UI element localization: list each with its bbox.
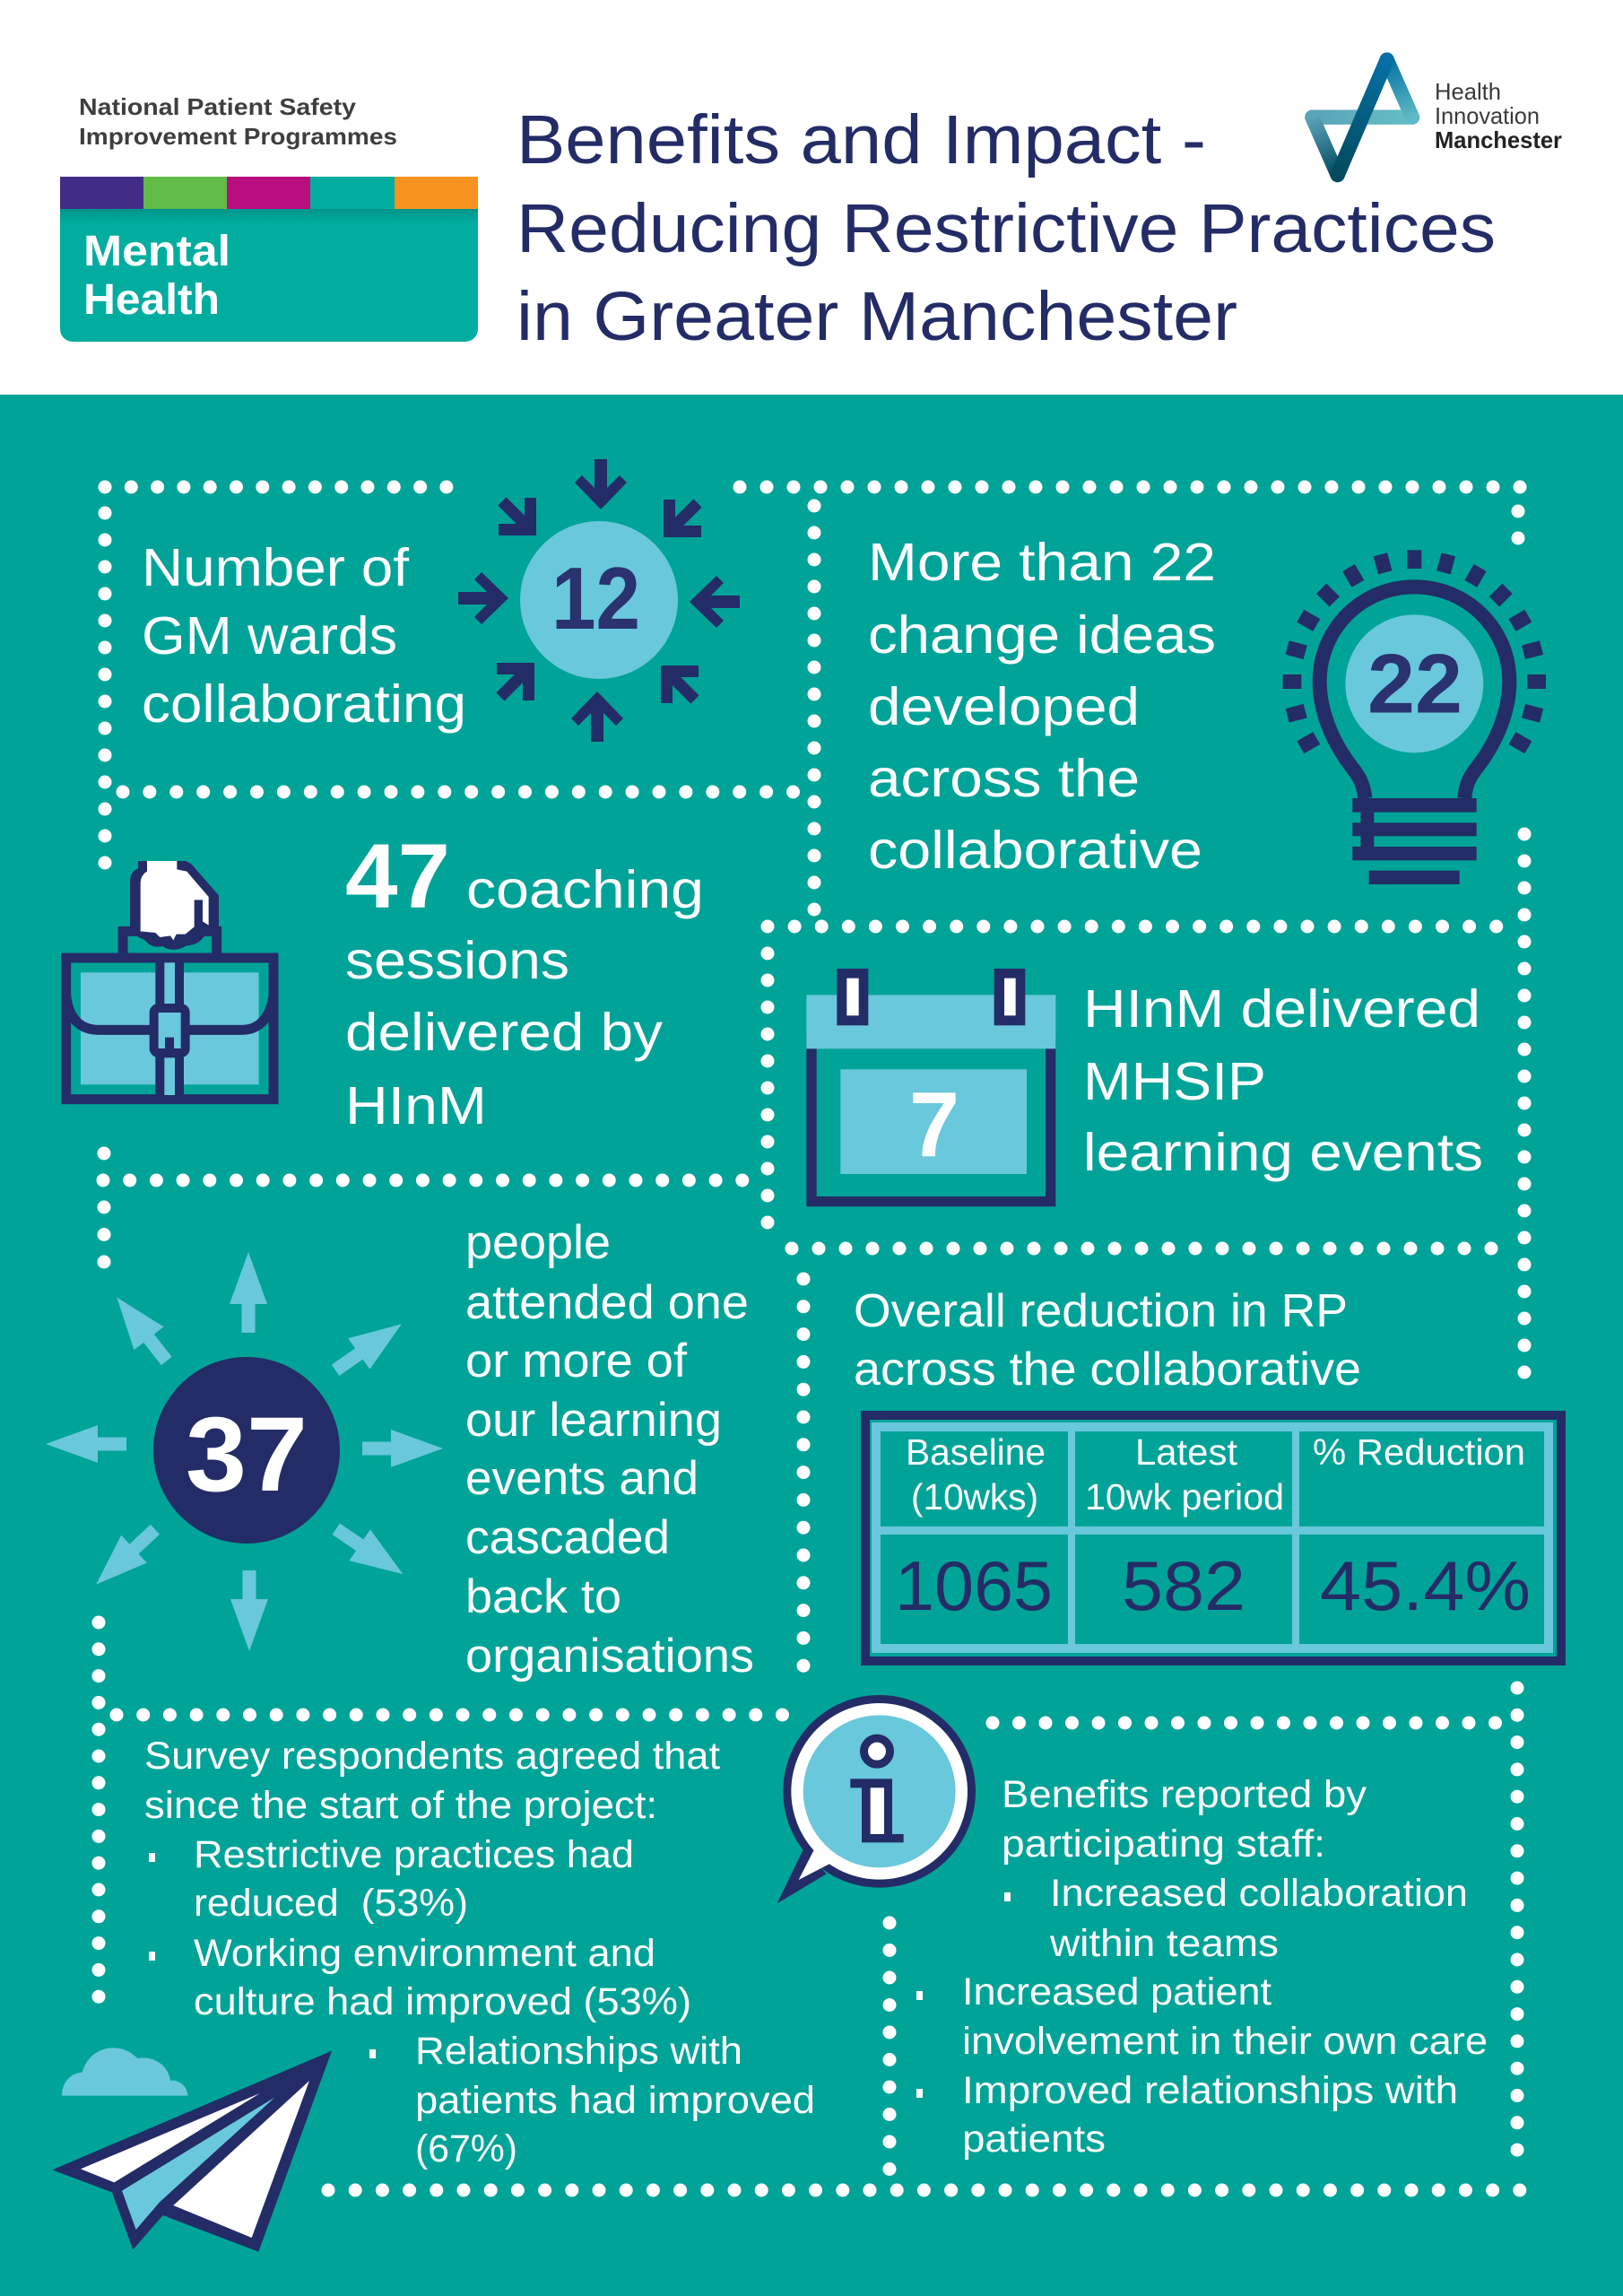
logo mark [1312, 60, 1412, 175]
Health Innovation Manchester logo [1312, 60, 1562, 175]
text: people attended: attended one [465, 1276, 749, 1329]
table: baseline, latest, reduction: (10wks) [911, 1476, 1038, 1518]
text: 47 coaching sessions: 47 [345, 825, 450, 927]
logo wordmark: Innovation [1435, 102, 1540, 129]
text: number of wards [142, 538, 466, 734]
text: people attended [465, 1216, 754, 1683]
text: survey intro [144, 1735, 720, 1827]
text: benefits intro: Benefits reported by [1002, 1773, 1367, 1816]
programme name [79, 93, 397, 150]
icon: 37 with outward arrows: 37 [186, 1396, 308, 1514]
text: benefits intro: participating staff: [1002, 1822, 1325, 1866]
list: benefits: Increased collaboration [1050, 1872, 1468, 1915]
text: people attended: back to [465, 1570, 621, 1623]
panel: staff benefits [916, 1773, 1488, 2161]
list: benefits: involvement in their own care [962, 2020, 1488, 2063]
list: survey results: Restrictive practices had [194, 1833, 634, 1876]
programme name: National Patient Safety [79, 93, 357, 120]
panel: people attended [46, 1216, 754, 1683]
text: 47 coaching sessions: sessions [345, 931, 569, 990]
title [516, 101, 1496, 355]
panel: GM wards collaborating [142, 459, 740, 742]
programme name: Improvement Programmes [79, 123, 397, 150]
programme logo: National Patient Safety Improvement Programmes, Mental Health [60, 93, 478, 342]
text: people attended: events and [465, 1452, 699, 1505]
text: 47 coaching sessions: coaching [466, 860, 704, 919]
text: change ideas: More than 22 [868, 533, 1216, 592]
panel: overall reduction [854, 1285, 1561, 1661]
table: baseline, latest, reduction: 45.4% [1320, 1546, 1531, 1625]
list: survey results: patients had improved [415, 2079, 815, 2122]
panel: survey respondents [52, 1735, 815, 2252]
text: HInM delivered MHSIP learning events [1083, 979, 1483, 1182]
list: survey results [149, 1833, 815, 2170]
text: people attended: cascaded [465, 1511, 670, 1564]
list: benefits: within teams [1049, 1922, 1279, 1965]
text: people attended: people [465, 1216, 611, 1269]
icon: hand holding briefcase [66, 861, 273, 1100]
text: HInM delivered MHSIP learning events: MHSIP [1083, 1052, 1266, 1111]
text: change ideas: collaborative [868, 821, 1202, 880]
panel: learning events [806, 969, 1483, 1202]
table: baseline, latest, reduction [865, 1415, 1561, 1661]
Mental Health panel [60, 209, 478, 342]
text: people attended: or more of [465, 1335, 687, 1387]
text: people attended: our learning [465, 1394, 722, 1447]
text: number of wards: Number of [142, 538, 410, 597]
text: change ideas [868, 533, 1216, 880]
icon: 12 with inward arrows: 12 [551, 549, 640, 648]
logo wordmark: Health [1435, 78, 1501, 105]
table: baseline, latest, reduction: Latest [1135, 1431, 1238, 1473]
text: number of wards: collaborating [142, 674, 466, 734]
list: survey results: Working environment and [194, 1932, 655, 1975]
text: overall reduction heading: Overall reduction in RP [854, 1285, 1348, 1337]
text: benefits intro [1002, 1773, 1367, 1866]
icon: information speech bubble [777, 1695, 976, 1903]
list: survey results: Relationships with [415, 2030, 742, 2073]
text: HInM delivered MHSIP learning events: learning events [1083, 1123, 1483, 1182]
table: baseline, latest, reduction: 582 [1122, 1546, 1245, 1625]
text: number of wards: GM wards [142, 606, 397, 665]
text: survey intro: since the start of the project: [144, 1784, 657, 1827]
list: benefits: Increased patient [962, 1970, 1271, 2013]
title: Benefits and Impact - [516, 101, 1206, 178]
table: baseline, latest, reduction: 10wk period [1085, 1476, 1284, 1518]
text: 47 coaching sessions: delivered by [345, 1003, 664, 1062]
list: benefits: Improved relationships with [962, 2069, 1458, 2112]
panel: coaching sessions [66, 825, 704, 1135]
icon: calendar 7 [806, 969, 1055, 1202]
table: baseline, latest, reduction: Baseline [906, 1431, 1046, 1473]
text: people attended: organisations [465, 1630, 754, 1683]
text: overall reduction heading [854, 1285, 1361, 1396]
text: overall reduction heading: across the collaborative [854, 1344, 1361, 1396]
panel: change ideas [868, 533, 1546, 884]
logo wordmark [1435, 78, 1562, 153]
icon: calendar 7: 7 [909, 1072, 959, 1176]
table: baseline, latest, reduction: 1065 [895, 1546, 1053, 1625]
icon: 12 with inward arrows [458, 459, 740, 742]
icon: light bulb 22 [1283, 550, 1546, 884]
Mental Health panel: Health [83, 276, 220, 324]
text: 47 coaching sessions: HInM [345, 1076, 487, 1135]
icon: 37 with outward arrows [46, 1252, 443, 1651]
text: HInM delivered MHSIP learning events: HInM delivered [1083, 979, 1480, 1039]
list: survey results: culture had improved (53%) [194, 1980, 691, 2023]
icon: light bulb 22: 22 [1367, 636, 1462, 730]
table: baseline, latest, reduction: % Reduction [1313, 1431, 1525, 1473]
text: 47 coaching sessions [345, 825, 704, 1135]
icon: paper plane [52, 2051, 332, 2252]
list: survey results: (67%) [415, 2127, 517, 2170]
text: survey intro: Survey respondents agreed that [144, 1735, 720, 1778]
list: survey results: reduced (53%) [194, 1882, 468, 1925]
text: change ideas: across the [868, 749, 1140, 808]
title: Reducing Restrictive Practices [516, 190, 1496, 267]
title: in Greater Manchester [516, 278, 1237, 355]
list: benefits [916, 1872, 1488, 2161]
icon: cloud [62, 2048, 187, 2096]
Mental Health panel: Mental [83, 228, 230, 275]
colour bar [60, 177, 478, 209]
text: change ideas: change ideas [868, 605, 1216, 665]
logo wordmark: Manchester [1435, 126, 1562, 153]
list: benefits: patients [962, 2118, 1106, 2161]
text: change ideas: developed [868, 677, 1140, 736]
